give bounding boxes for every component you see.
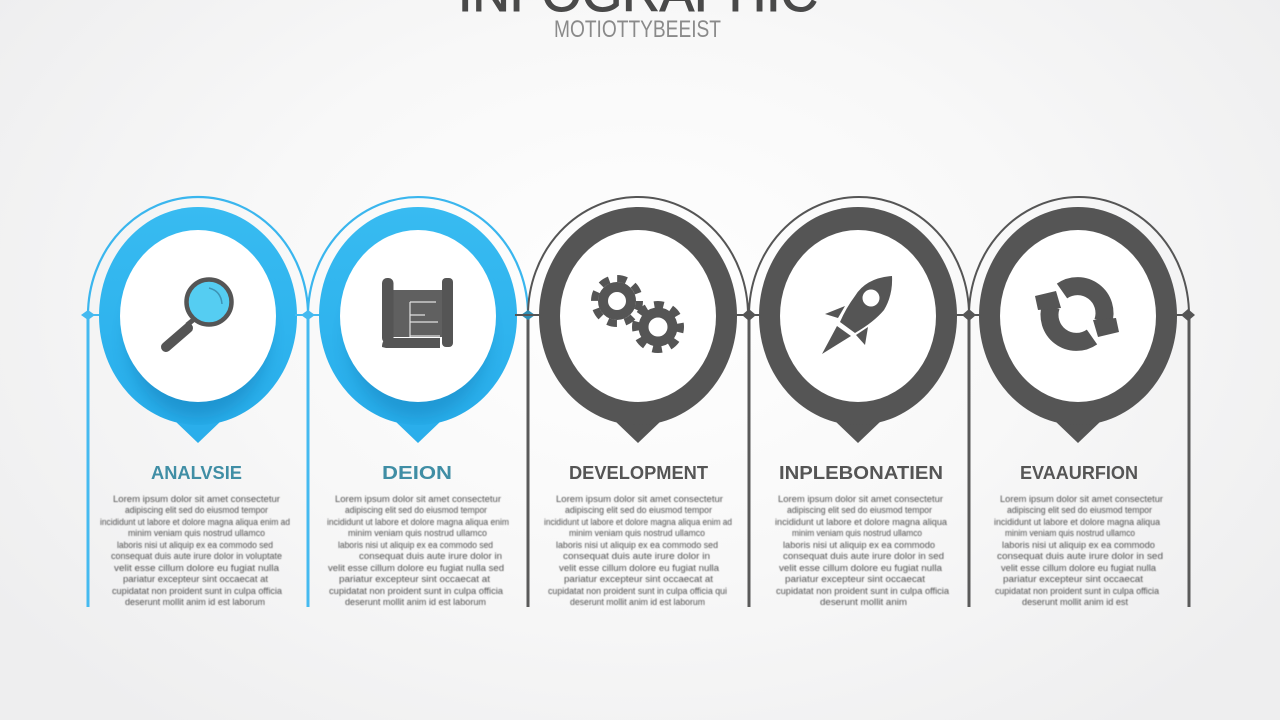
body text: velit esse cillum dolore eu fugiat nulla sed [328,563,504,573]
body text: adipiscing elit sed do eiusmod tempor [787,505,932,515]
body text [100,494,290,607]
body text: Lorem ipsum dolor sit amet consectetur [1000,494,1163,504]
icon: blueprint [382,278,453,348]
arch [749,197,969,315]
heading: INPLEBONATIEN [779,463,943,483]
body text: Lorem ipsum dolor sit amet consectetur [335,494,501,504]
body text: cupidatat non proident sunt in culpa officia [112,586,282,596]
body text: pariatur excepteur sint occaecat at [564,574,714,584]
panel: evaluation [956,197,1189,607]
body text: velit esse cillum dolore eu fugiat nulla [779,563,942,573]
heading: DEVELOPMENT [569,463,708,483]
body text: minim veniam quis nostrud ullamco [128,528,265,538]
body text: adipiscing elit sed do eiusmod tempor [565,505,712,515]
pin [539,207,737,443]
left rule and node [81,310,102,607]
body text: pariatur excepteur sint occaecat at [123,574,269,584]
body text: consequat duis aute irure dolor in voluptate [111,551,282,561]
body text [544,494,732,607]
body text: deserunt mollit anim id est laborum [125,597,265,607]
arch [969,197,1189,315]
icon: refresh arrows [1035,286,1119,342]
body text: incididunt ut labore et dolore magna aliqua [775,517,947,527]
body text: Lorem ipsum dolor sit amet consectetur [556,494,723,504]
body text: minim veniam quis nostrud ullamco [348,528,487,538]
body text: adipiscing elit sed do eiusmod tempor [345,505,487,515]
pin [319,207,517,443]
arch [308,197,528,315]
body text: adipiscing elit sed do eiusmod tempor [1007,505,1152,515]
right rule and node [1176,309,1195,607]
body text: consequat duis aute irure dolor in sed [997,551,1163,561]
body text: minim veniam quis nostrud ullamco [1005,528,1135,538]
icon: gears [594,278,680,350]
body text [327,494,509,607]
heading: ANALVSIE [151,463,242,483]
body text [775,494,949,607]
body text: consequat duis aute irure dolor in [359,551,502,561]
body text: pariatur excepteur sint occaecat [785,574,926,584]
body text: incididunt ut labore et dolore magna aliqua enim ad [100,517,290,527]
body text: laboris nisi ut aliquip ex ea commodo [783,540,935,550]
body text: pariatur excepteur sint occaecat [1003,574,1144,584]
body text: incididunt ut labore et dolore magna aliqua enim [327,517,509,527]
body text: cupidatat non proident sunt in culpa officia qui [548,586,727,596]
icon: magnifier [166,280,232,347]
body text: cupidatat non proident sunt in culpa officia [776,586,949,596]
body text: minim veniam quis nostrud ullamco [569,528,705,538]
body text [994,494,1163,607]
body text: velit esse cillum dolore eu fugiat nulla [114,563,279,573]
left rule and node [295,310,322,607]
pin [99,207,297,443]
icon: rocket [822,276,892,354]
pin [759,207,957,443]
body text: cupidatat non proident sunt in culpa officia [995,586,1159,596]
body text: consequat duis aute irure dolor in sed [783,551,944,561]
body text: deserunt mollit anim id est laborum [345,597,486,607]
body text: incididunt ut labore et dolore magna aliqua [994,517,1160,527]
arch [528,197,748,315]
body text: consequat duis aute irure dolor in [563,551,710,561]
body text: laboris nisi ut aliquip ex ea commodo sed [117,540,273,550]
panel: design [295,197,528,607]
panel: analysis [81,197,308,607]
body text: deserunt mollit anim id est laborum [570,597,705,607]
arch [88,197,308,315]
body text: Lorem ipsum dolor sit amet consectetur [113,494,280,504]
body text: minim veniam quis nostrud ullamco [792,528,922,538]
body text: velit esse cillum dolore eu fugiat nulla [559,563,719,573]
panel: development [515,197,748,607]
left rule and node [956,309,983,607]
left rule and node [515,310,542,607]
heading: DEION [382,463,452,483]
body text: laboris nisi ut aliquip ex ea commodo sed [338,540,493,550]
subtitle: MOTIOTTYBEEIST [554,16,721,43]
body text: deserunt mollit anim id est [1022,597,1129,607]
panel: implementation [736,197,969,607]
body text: Lorem ipsum dolor sit amet consectetur [778,494,943,504]
body text: velit esse cillum dolore eu fugiat nulla [1001,563,1156,573]
pin [979,207,1177,443]
body text: pariatur excepteur sint occaecat at [339,574,491,584]
heading: EVAAURFION [1020,463,1138,483]
body text: laboris nisi ut aliquip ex ea commodo sed [556,540,718,550]
body text: adipiscing elit sed do eiusmod tempor [125,505,268,515]
body text: cupidatat non proident sunt in culpa officia [329,586,503,596]
left rule and node [736,309,763,607]
body text: laboris nisi ut aliquip ex ea commodo [1002,540,1155,550]
body text: deserunt mollit anim [820,597,907,607]
body text: incididunt ut labore et dolore magna aliqua enim ad [544,517,732,527]
